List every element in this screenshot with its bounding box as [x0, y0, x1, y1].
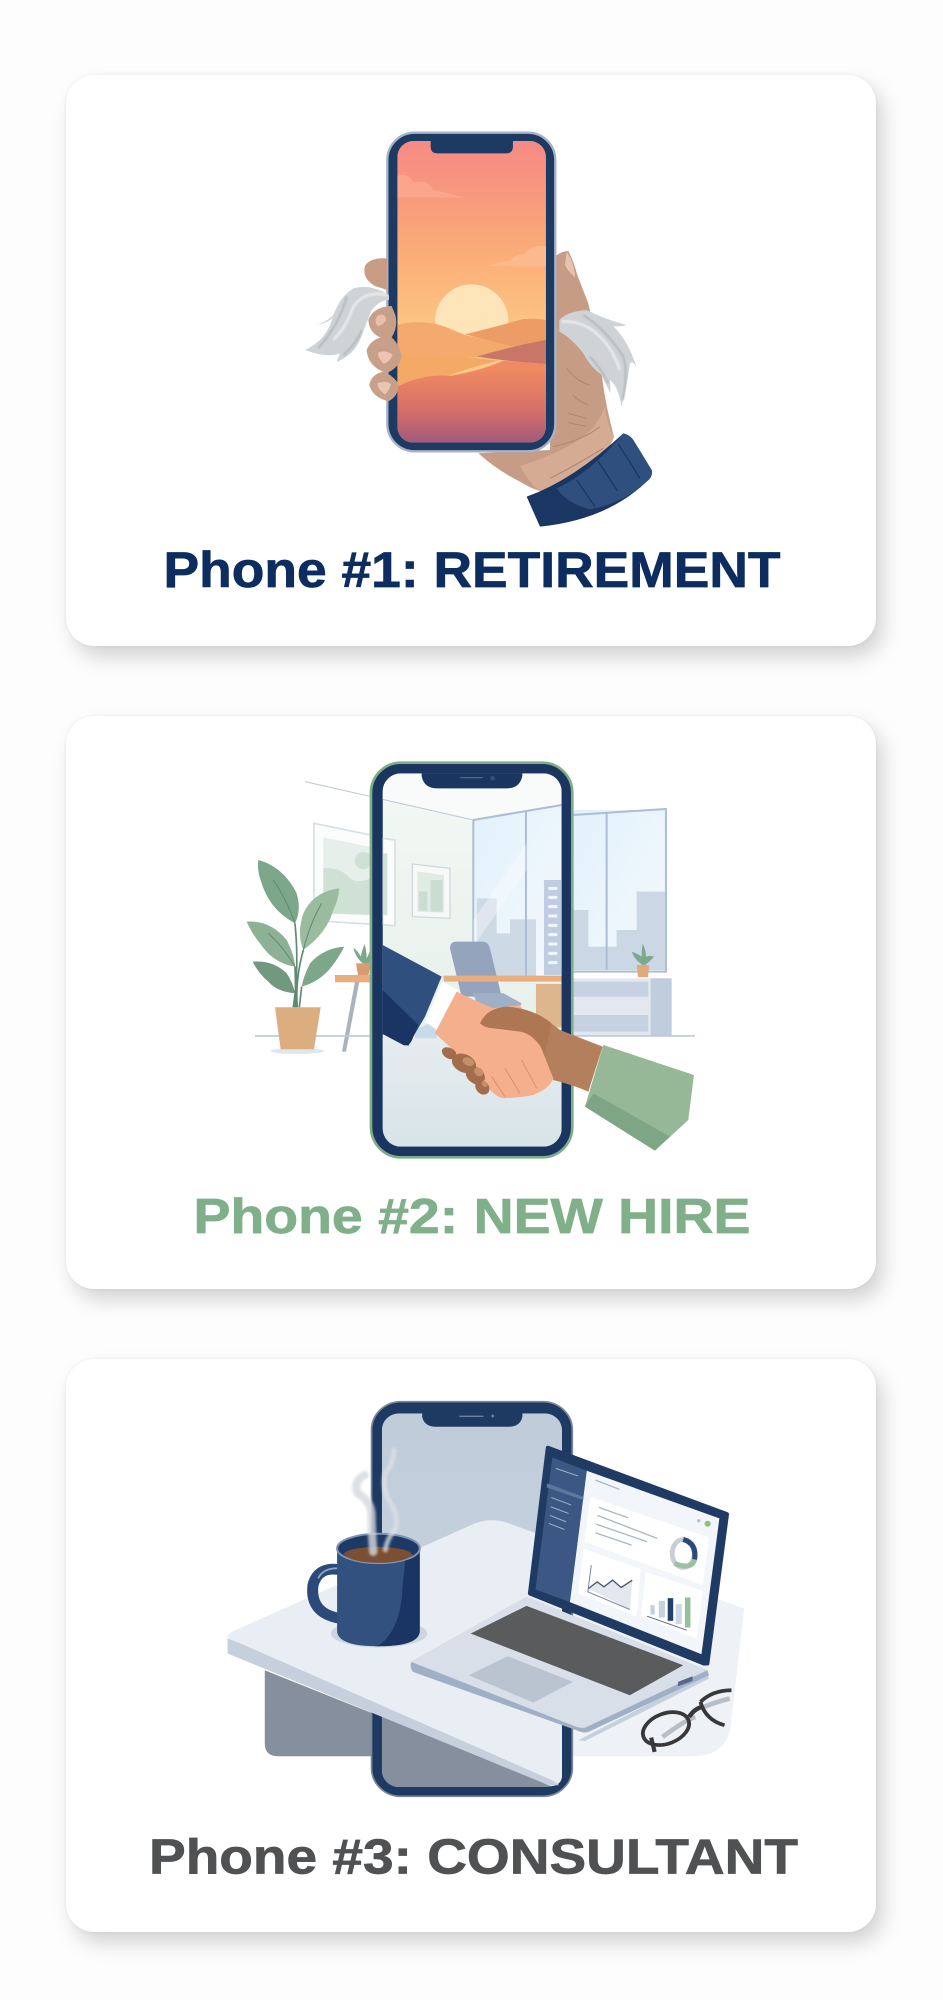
- illustration: old hand holding phone with sunset: [305, 133, 652, 527]
- phone body: [371, 763, 572, 1157]
- potted plant: [247, 860, 344, 1054]
- phone body: [372, 1402, 572, 1796]
- laptop base: [411, 1597, 709, 1732]
- illustration: handshake through phone in office: [247, 763, 695, 1157]
- heading: Phone 1: Phone #1: RETIREMENT: [164, 542, 780, 598]
- light hand: [435, 992, 553, 1098]
- phone body: [387, 133, 555, 451]
- notch: [422, 1413, 522, 1427]
- panel: Phone 3 consultant: [66, 1359, 876, 1932]
- right hair: [559, 310, 637, 407]
- dark fingers: [440, 1045, 459, 1062]
- desk top: [228, 1520, 562, 1786]
- trackpad: [469, 1656, 573, 1703]
- notch: [422, 773, 522, 788]
- desk back parts: [265, 1543, 744, 1756]
- keyboard: [471, 1606, 683, 1695]
- sleeve cuff: [527, 433, 652, 527]
- screen office scene: [383, 773, 564, 1147]
- sleeve right: [585, 1045, 694, 1151]
- hand and thumb: [478, 251, 614, 492]
- dark forearm: [480, 1007, 603, 1092]
- coffee mug: [313, 1534, 427, 1648]
- glasses: [638, 1690, 731, 1752]
- fingers: [364, 258, 402, 401]
- office background: [255, 782, 695, 1052]
- dashboard: [546, 1468, 711, 1639]
- illustration: phone, desk, mug and laptop: [228, 1402, 744, 1796]
- laptop: [411, 1448, 727, 1741]
- heading: Phone 2: Phone #2: NEW HIRE: [194, 1190, 750, 1244]
- panel: Phone 1 retirement: [66, 75, 876, 646]
- panel: Phone 2 new hire: [66, 716, 876, 1289]
- laptop lid: [530, 1448, 727, 1664]
- left hair: [305, 287, 389, 362]
- handshake: [435, 992, 694, 1151]
- notch: [431, 141, 513, 153]
- sunset screen: [397, 141, 546, 443]
- hinge port: [678, 1676, 693, 1686]
- steam: [356, 1450, 397, 1552]
- heading: Phone 3: Phone #3: CONSULTANT: [149, 1830, 798, 1884]
